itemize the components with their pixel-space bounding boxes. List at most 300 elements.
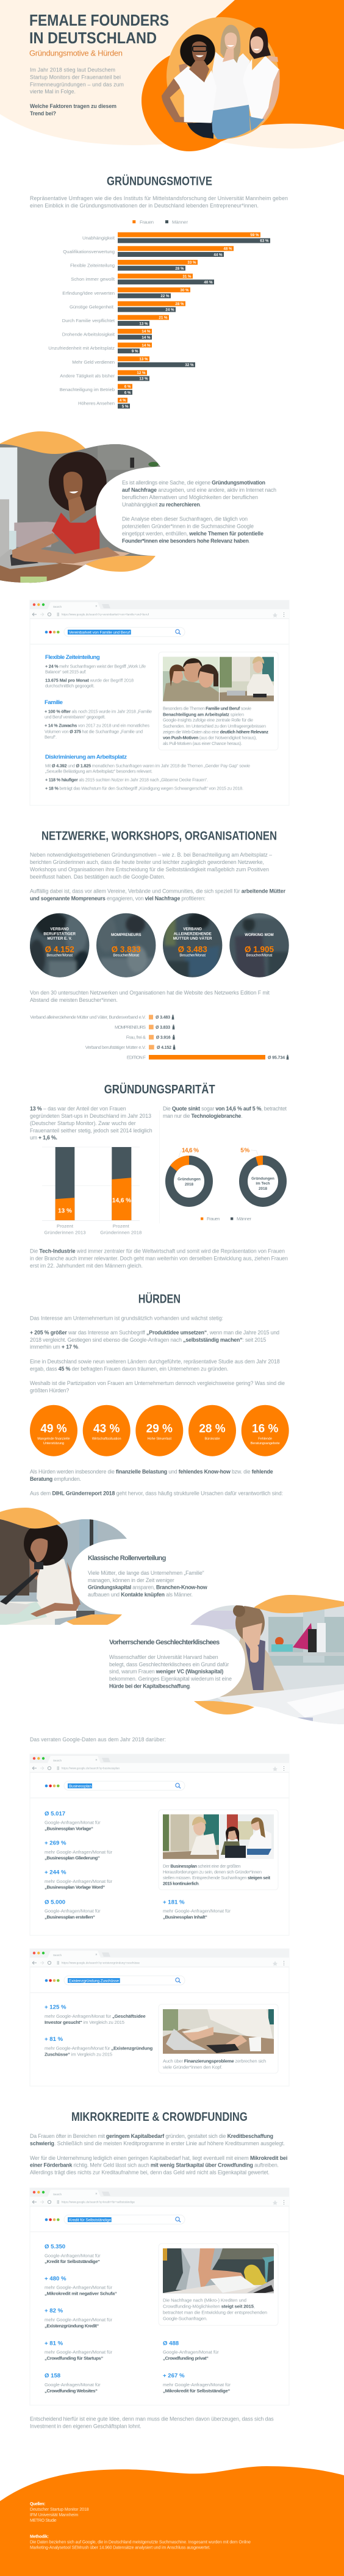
search box <box>64 1976 185 1985</box>
text: Edition F: Abstand die meisten Besucher*innen. <box>30 997 118 1003</box>
card: Nachfrage Mikrokredite: betrachtet man die Entwicklung der entsprechenden <box>163 2310 267 2315</box>
card: Businessplan: stellen müssen. Entsprechende Suchanfragen steigen seit <box>163 1875 271 1880</box>
text: Vorherrschende Geschlechterklischees: Wissenschaftler der Universität Harvard haben <box>109 1654 218 1660</box>
card: Finanzierungsprobleme <box>159 2004 278 2073</box>
bar chart: visitors: Ø 4.152 <box>157 1046 171 1050</box>
search box: Businessplan <box>69 1784 91 1789</box>
bar chart: motives: 22 % <box>160 294 170 298</box>
text: Familie <box>45 699 152 740</box>
card: Nachfrage Mikrokredite: Crowdfunding-Möglichkeiten steigt seit 2015, <box>163 2304 255 2309</box>
circle: Mompreneurs <box>96 913 156 982</box>
text: Entscheidend <box>30 2416 274 2430</box>
stat: Mikrokredit für Selbstständige: + 267 % <box>163 2373 185 2380</box>
stat circle: 28 % <box>188 1405 236 1456</box>
text: Interesse: immerhin um + 17 %. <box>30 1344 79 1350</box>
bar chart: motives: Schon immer gewollt <box>71 276 115 282</box>
bar chart: motives: 5 % <box>122 405 129 409</box>
text: Vorherrschende Geschlechterklischees: bekommen. Geringes Eigenkapital wiederum ist eine <box>109 1675 232 1682</box>
stat: Businessplan Gliederung: mehr Google-Anfragen/Monat für <box>45 1849 112 1855</box>
text: Netzwerke: Workshops und Organisationen ihre Entscheidung für die Selbstständigkeit maßgeblich zum Positiven <box>30 866 269 872</box>
stat: Crowdfunding für Startups: „Crowdfunding für Startups“ <box>45 2356 103 2361</box>
text: 13 %: gegründeten Start-ups in Deutschland im Jahr 2013 <box>30 1113 151 1119</box>
stat: Businessplan Inhalt <box>163 1899 231 1919</box>
search box: Kredit für Selbstständige <box>69 2218 111 2222</box>
intro paragraph: einen Einblick in die Gründungsmotivationen der in Deutschland lebenden Entrepreneur*innen. <box>30 203 259 209</box>
stat: Businessplan Vorlage: Ø 5.017 <box>45 1810 65 1817</box>
browser panel: Kredit für Selbstständige: ✕ <box>95 2192 98 2195</box>
stat: Mikrokredit mit negativer Schufa: mehr Google-Anfragen/Monat für <box>45 2285 112 2290</box>
methodology: Die Daten beziehen sich auf Google, die in Deutschland meistgenutzte Suchmaschine. Insgesamt wurden mit dem Online <box>30 2540 251 2544</box>
stat circle: 29 %: Hohe Steuerlast <box>148 1437 171 1441</box>
text: Interesse: Das Interesse am Unternehmertum ist grundsätzlich vorhanden und wächst stetig: <box>30 1315 223 1321</box>
stat: Businessplan Gliederung: + 269 % <box>45 1840 66 1847</box>
photo: woman with calculator <box>163 2009 274 2054</box>
text: Gründungsmotivation: eingetippt werden, enthüllen, welche Themen für potentielle <box>122 531 263 537</box>
text: Quote sinkt: Die Quote sinkt sogar von 14,6 % auf 5 %, betrachtet <box>163 1106 287 1112</box>
text: Netzwerke: und sogenannte Mompreneurs engagieren, von viel Nachfrage profitieren: <box>30 895 206 901</box>
bar chart: motives: 13 % <box>139 322 148 326</box>
address bar: https://www.google.de/search?q=kredit+für+selbstständige <box>62 2200 135 2204</box>
text: Netzwerke: berichten Gründerinnen auch, dass die heute breiter und leichter zugänglich gewordenen Netzwerke, <box>30 859 264 865</box>
text: Gründungsmotivation: potenziellen Gründer*innen in die Suchmaschine Google <box>122 523 254 530</box>
stat: Kredit für Selbstständige: Ø 5.350 <box>45 2243 65 2250</box>
browser panel: Kredit für Selbstständige: Search <box>53 2193 62 2196</box>
text: Familie: und Beruf vereinbaren“ gegoogelt. <box>45 714 106 720</box>
bar chart: motives: 63 % <box>260 239 269 243</box>
stat: Kredit für Selbstständige: „Kredit für Selbstständige“ <box>45 2259 100 2264</box>
stat: Crowdfunding Websites: Google-Anfragen/Monat für <box>45 2382 101 2387</box>
text: Gründungsmotivation: auf Nachfrage anzugeben, und eine andere, aktiv im Internet nach <box>122 487 276 493</box>
stat: Mikrokredit für Selbstständige <box>163 2373 231 2394</box>
text: Netzwerke: beeinflusst haben. Das bestätigen auch die Google-Daten. <box>30 874 165 880</box>
circle: Mompreneurs: Ø 3.833 <box>112 945 141 954</box>
stat: Existenzgründung Kredit: mehr Google-Anfragen/Monat für <box>45 2317 112 2323</box>
bar chart: motives: Mehr Geld verdienen <box>72 359 115 365</box>
donut chart: Gründungen im Tech 2018 <box>238 1148 287 1207</box>
stat: Geschäftsidee Investor gesucht <box>45 2004 146 2025</box>
stacked bar chart: 14,6 % <box>112 1197 131 1204</box>
stat: Existenzgründung Zuschüsse: Zuschüsse“ im Vergleich zu 2015 <box>45 2051 112 2057</box>
donut chart: Gründungen 2018: Gründungen <box>177 1178 201 1182</box>
stat: Crowdfunding privat: Google-Anfragen/Monat für <box>163 2350 219 2355</box>
donut chart: Gründungen 2018: 2018 <box>185 1182 193 1187</box>
bar chart: motives: Drohende Arbeitslosigkeit <box>62 332 115 337</box>
window controls <box>33 1757 45 1760</box>
legend: motives: Männer <box>172 219 188 225</box>
stat: Businessplan Vorlage: „Businessplan Vorlage“ <box>45 1826 93 1831</box>
bar chart: motives: 6 % <box>124 390 131 395</box>
stat: Businessplan Vorlage <box>45 1810 101 1831</box>
text: Vorherrschende Geschlechterklischees: sind, warum Frauen weniger VC (Wagniskapital) <box>109 1669 223 1675</box>
text: Netzwerke: Neben notwendigkeitsgetriebenen Gründungsmotiven – wie z. B. bei Benachteiligung am Arbeitsplatz – <box>30 852 272 858</box>
address bar <box>32 1766 284 1771</box>
intro text: Welche Faktoren tragen zu diesem <box>30 103 116 109</box>
circle: Verband alleinerziehende: Ø 3.483 <box>178 945 207 954</box>
stat: Businessplan Gliederung: „Businessplan Gliederung“ <box>45 1855 100 1861</box>
text: Klassische Rollenverteilung: Viele Mütter, die lange das Unternehmen „Familie“ <box>88 1570 204 1576</box>
bar chart: motives <box>48 232 270 409</box>
bar chart: visitors: Verband alleinerziehende Mütter und Väter, Bundesverband e.V. <box>30 1014 146 1020</box>
browser panel: Businessplan: Search <box>53 1759 62 1762</box>
text: Diskriminierung am Arbeitsplatz: „Sexuelle Belästigung am Arbeitsplatz“ besonders relevant. <box>45 769 152 774</box>
text: finanzielle Belastung: Beratung empfunden. <box>30 1476 81 1482</box>
browser panel: Vereinbarkeit von Familie und Beruf: Search <box>53 605 62 608</box>
browser panel: Existenzgründung Zuschüsse <box>30 1949 289 2086</box>
stacked bar chart: 13 % <box>58 1208 72 1215</box>
text: Familie: Beruf“. <box>45 735 57 740</box>
legend: donuts: Männer <box>237 1216 251 1221</box>
window controls <box>33 603 45 606</box>
stat: Crowdfunding privat: „Crowdfunding privat“ <box>163 2356 209 2361</box>
text: Mikrokredite <box>30 2133 287 2176</box>
search box: Vereinbarkeit von Familie und Beruf <box>69 631 130 635</box>
text: Interesse: Weshalb ist die Partizipation von Frauen am Unternehmertum dennoch vergleichsweise gering? Was sind die <box>30 1380 285 1386</box>
bar chart: motives: 14 % <box>142 336 151 340</box>
text: Familie: + 14 % Zuwachs von 2017 zu 2018 und ein monatliches <box>45 723 149 729</box>
card: Finanzierungsprobleme: viele Gründer*innen den Kopf. <box>163 2065 223 2070</box>
text: Netzwerke <box>30 852 286 901</box>
stat: Existenzgründung Zuschüsse: + 81 % <box>45 2036 63 2043</box>
text: Klassische Rollenverteilung: aufbauen und Kontakte knüpfen als Männer. <box>88 1592 193 1598</box>
browser panel: Businessplan <box>30 1754 289 1935</box>
text: Interesse: + 205 % größer war das Interesse am Suchbegriff „Produktidee umsetzen“, wenn man die Jahre 2015 und <box>30 1329 279 1336</box>
text: Gründungsmotivation: Es ist allerdings eine Sache, die eigene Gründungsmotivation <box>122 480 265 486</box>
logo dots <box>45 2218 60 2221</box>
photo: women working <box>163 1815 274 1859</box>
bar chart: motives: Günstige Gelegenheit <box>70 304 114 309</box>
text: finanzielle Belastung: Als Hürden werden insbesondere die finanzielle Belastung und fehlendes Know-how bzw. die fehlende <box>30 1469 273 1475</box>
stat: Existenzgründung Zuschüsse <box>45 2036 153 2057</box>
methodology: Methodik: <box>30 2535 49 2539</box>
stat circle: 16 % <box>242 1405 289 1456</box>
stat: Geschäftsidee Investor gesucht: + 125 % <box>45 2004 66 2011</box>
bar chart: motives: 6 % <box>124 385 131 389</box>
text: Quote sinkt: man nur die Technologiebranche. <box>163 1113 243 1119</box>
text: Gründungsmotivation: Die Analyse eben dieser Suchanfragen, die täglich von <box>122 516 248 522</box>
bar chart: motives: 59 % <box>250 233 259 237</box>
bar chart: visitors <box>30 1014 288 1060</box>
stat circle: 28 %: 28 % <box>199 1422 226 1435</box>
browser panel: Existenzgründung Zuschüsse: Search <box>53 1954 62 1957</box>
stat circle: 28 %: Bürokratie <box>204 1437 220 1441</box>
stat: Crowdfunding für Startups: + 81 % <box>45 2340 63 2347</box>
bar chart: motives: 30 % <box>180 288 189 292</box>
text: 13 %: (Deutscher Startup Monitor). Zwar wuchs der <box>30 1120 136 1126</box>
stat: Businessplan Inhalt: „Businessplan Inhalt“ <box>163 1914 207 1919</box>
hero background <box>0 0 344 151</box>
card: Familie und Beruf: Suchenden. Im Unterschied zu den Umfrageergebnissen <box>163 723 266 729</box>
icons: person <box>172 1015 288 1060</box>
bar chart: visitors: EDITION F <box>127 1054 146 1060</box>
stat: Businessplan Gliederung <box>45 1840 112 1861</box>
bar chart: motives: Andere Tätigkeit als bisher <box>60 373 115 378</box>
search box: Existenzgründung Zuschüsse <box>69 1979 119 1983</box>
bar chart: visitors: Verband berufstätiger Mütter e.V. <box>85 1045 146 1050</box>
search box <box>64 1781 185 1790</box>
stat: Mikrokredit mit negativer Schufa: + 480 % <box>45 2275 66 2282</box>
stat circle: 16 %: 16 % <box>252 1422 278 1435</box>
card: Familie und Beruf: Google-Insights zufolge eine zentrale Rolle für die <box>163 718 253 723</box>
text: Klassische Rollenverteilung: managen, können in der Zeit weniger <box>88 1577 174 1583</box>
stat: Existenzgründung Kredit: + 82 % <box>45 2308 63 2314</box>
bar chart: motives: 28 % <box>175 267 184 271</box>
photo blob: woman at laptop <box>0 431 160 583</box>
text: 13 % <box>30 1106 152 1141</box>
legend: motives <box>132 219 188 225</box>
circle: Mompreneurs: MOMPRENEURS <box>111 933 141 937</box>
intro text: Startup Monitors der Frauenanteil bei <box>30 74 121 81</box>
bar chart: motives: 4 % <box>120 398 126 403</box>
stat: Crowdfunding Websites: „Crowdfunding Websites“ <box>45 2388 98 2394</box>
methodology: Marketing-Analysetool SEMrush über 14.960 Datensätze analysiert und im Anschluss ausgewertet. <box>30 2546 210 2550</box>
text: Quote sinkt <box>163 1106 287 1119</box>
stat: Businessplan Vorlage Word: + 244 % <box>45 1869 66 1876</box>
text: 13 %: 13 % – das war der Anteil der von Frauen <box>30 1106 126 1112</box>
card: Familie und Beruf: Besonders die Themen Familie und Beruf sowie <box>163 706 251 711</box>
bar chart: motives: Qualifikationsverwertung <box>63 249 115 254</box>
stat: Geschäftsidee Investor gesucht: mehr Google-Anfragen/Monat für „Geschäftsidee <box>45 2013 146 2019</box>
bar chart: motives: 13 % <box>139 357 148 361</box>
circle: Working Mom: WORKING MOM <box>245 933 274 937</box>
circle: Verband alleinerziehende <box>163 913 222 979</box>
address bar <box>32 613 284 617</box>
stat: Businessplan Inhalt: + 181 % <box>163 1899 185 1905</box>
text: Diskriminierung am Arbeitsplatz: Mit Ø 4.392 und Ø 1.825 monatlichen Suchanfragen waren im Jahr 2018 die Themen „Gender Pay Gap“ sowie <box>45 763 250 768</box>
text: Mikrokredite: Allerdings trägt dies nichts zur Kreditaufnahme bei, denn das Geld wird nicht als Eigenkapital gewertet. <box>30 2170 270 2176</box>
card: Familie und Beruf <box>159 652 278 750</box>
stat: Businessplan Vorlage: Google-Anfragen/Monat für <box>45 1820 101 1826</box>
stat: Businessplan Vorlage Word: „Businessplan Vorlage Word“ <box>45 1885 105 1890</box>
circle: Verband berufstätiger Mütter: BERUFSTÄTIGER <box>43 932 76 936</box>
card: Nachfrage Mikrokredite: Die Nachfrage nach (Mikro-) Krediten und <box>163 2298 246 2303</box>
text: Diskriminierung am Arbeitsplatz <box>45 754 250 791</box>
subtitle: Gründungsmotive & Hürden <box>29 49 123 57</box>
circle: Verband berufstätiger Mütter: VERBAND <box>50 927 70 931</box>
circle: Working Mom: Ø 1.905 <box>245 945 274 954</box>
text: finanzielle Belastung: Aus dem DIHL Gründerreport 2018 geht hervor, dass häufig strukturelle Ursachen dafür verantwortlich sind: <box>30 1491 283 1497</box>
stat: Businessplan erstellen: „Businessplan erstellen“ <box>45 1914 95 1919</box>
legend: donuts <box>201 1216 251 1221</box>
text: Mikrokredite: einer Förderbank richtig. Mehr Geld lässt sich auch mit wenig Startkapital über Crowdfunding auftreiben. <box>30 2162 279 2168</box>
bar chart: motives: 12 % <box>137 371 146 375</box>
bar chart: visitors: Ø 3.833 <box>156 1026 170 1030</box>
stat circle: 49 %: Unterstützung <box>43 1442 64 1445</box>
text: Gründungsmotivation: Unabhängigkeit zu recherchieren. <box>122 502 201 508</box>
text: Flexible Zeiteinteilung: durchschnittlich gegoogelt. <box>45 683 95 689</box>
bar chart: motives: 48 % <box>223 247 232 251</box>
stat circle: 43 % <box>83 1405 131 1456</box>
legend: motives: Frauen <box>140 219 154 225</box>
stat: Businessplan Vorlage Word <box>45 1869 112 1890</box>
bar chart: motives: Unzufriedenheit mit Arbeitsplatz <box>48 345 115 351</box>
stat: Businessplan erstellen <box>45 1899 101 1919</box>
address bar <box>32 2200 284 2205</box>
text: Flexible Zeiteinteilung: Balance“ seit 2015 auf: <box>45 669 87 675</box>
browser panel: Vereinbarkeit von Familie und Beruf <box>30 600 289 805</box>
footer <box>0 2466 344 2576</box>
bar chart: visitors: Ø 3.483 <box>156 1015 170 1020</box>
stat: Mikrokredit für Selbstständige: mehr Google-Anfragen/Monat für <box>163 2382 231 2387</box>
stat: Mikrokredit für Selbstständige: „Mikrokredit für Selbstständige“ <box>163 2388 230 2394</box>
text: Vorherrschende Geschlechterklischees <box>109 1639 232 1689</box>
stat: Existenzgründung Zuschüsse: mehr Google-Anfragen/Monat für „Existenzgründung <box>45 2045 153 2051</box>
heading: Netzwerke: NETZWERKE, WORKSHOPS, ORGANISATIONEN <box>41 830 277 843</box>
stat: Businessplan Inhalt: mehr Google-Anfragen/Monat für <box>163 1909 231 1914</box>
address bar <box>32 1961 284 1966</box>
heading: Mikrokredite: MIKROKREDITE & CROWDFUNDING <box>71 2110 248 2124</box>
photo blob: businesswoman <box>0 1595 344 1727</box>
text: Flexible Zeiteinteilung: 13.675 Mal pro Monat wurde der Begriff 2018 <box>45 677 134 683</box>
bar chart: visitors: MOMPRENEURS <box>115 1024 146 1030</box>
stat circle: 49 %: 49 % <box>40 1422 67 1435</box>
circle: Working Mom: Besucher/Monat <box>246 954 273 958</box>
title: IN DEUTSCHLAND <box>29 29 157 47</box>
circle: Working Mom <box>229 912 293 979</box>
bar chart: motives: Durch Familie verpflichtet <box>62 318 115 323</box>
intro paragraph: Repräsentative Umfragen wie die des Instituts für Mittelstandsforschung der Universität Mannheim geben <box>30 195 288 201</box>
circle: Verband berufstätiger Mütter: Ø 4.152 <box>45 945 74 954</box>
text: 13 %: Frauenanteil seither stetig, jedoch seit 2014 lediglich <box>30 1128 152 1134</box>
text: Interesse: größten Hürden? <box>30 1387 69 1394</box>
text: Flexible Zeiteinteilung: + 24 % mehr Suchanfragen weist der Begriff „Work Life <box>45 663 146 669</box>
text: Interesse: Eine in Deutschland sowie neun weiteren Ländern durchgeführte, repräsentative Studie aus dem Jahr 2018 <box>30 1359 280 1365</box>
text: Netzwerke: Auffällig dabei ist, dass vor allem Vereine, Verbände und Communities, die sich speziell für arbeitende Mütter <box>30 888 286 894</box>
text: Tech-Industrie <box>30 1248 288 1268</box>
circle: Verband alleinerziehende: ALLEINERZIEHENDE <box>174 932 212 936</box>
card: Finanzierungsprobleme: Auch über Finanzierungsprobleme zerbrechen sich <box>163 2059 266 2064</box>
text: Edition F <box>30 990 270 1003</box>
photo blob: woman on phone <box>0 1508 127 1625</box>
text: Interesse: 2018 vergleicht. Gestiegen sind ebenso die Google-Anfragen nach „selbstständig machen“: seit 2015 <box>30 1337 266 1343</box>
donut chart: Gründungen 2018 <box>162 1148 217 1211</box>
bar chart: visitors: Ø 95.734 <box>268 1056 285 1060</box>
circle: Verband berufstätiger Mütter: Besucher/Monat <box>46 954 73 958</box>
intro text <box>30 67 124 117</box>
text: Gründungsmotivation: Founder*innen eine besonders hohe Relevanz haben. <box>122 538 250 544</box>
stacked bar chart: Prozent <box>113 1223 130 1229</box>
stacked bar chart: Prozent <box>57 1223 74 1229</box>
stacked bar chart <box>42 1147 142 1236</box>
bar chart: motives: 14 % <box>142 329 151 334</box>
text: Mikrokredite: schwierig. Schließlich sind die meisten Kreditprogramme in erster Linie auf höhere Kreditsummen ausgelegt. <box>30 2140 285 2146</box>
stat circle: 16 %: Fehlende <box>258 1437 272 1441</box>
circle: Mompreneurs: Besucher/Monat <box>113 954 139 958</box>
stat circle: 16 %: Beratungsangebote <box>251 1442 280 1445</box>
card: Familie und Beruf: von Push-Motiven (aus der Notwendigkeit heraus), <box>163 735 257 740</box>
bar chart: motives: 32 % <box>185 363 194 367</box>
text: Tech-Industrie: Die Tech-Industrie wird immer zentraler für die Weltwirtschaft und somit wird die Repräsentation von Frauen <box>30 1248 285 1254</box>
text: Diskriminierung am Arbeitsplatz: + 118 % häufiger als 2015 suchten Nutzer im Jahr 2018 nach „Gläserne Decke Frauen“. <box>45 777 208 782</box>
donut chart: Gründungen im Tech 2018: Gründungen <box>251 1177 274 1181</box>
donut chart: Gründungen im Tech 2018: im Tech <box>256 1182 270 1186</box>
bar chart: motives: 31 % <box>182 275 192 279</box>
text: Klassische Rollenverteilung: Klassische Rollenverteilung <box>88 1555 166 1562</box>
stat: Existenzgründung Kredit <box>45 2308 112 2328</box>
text: Interesse <box>30 1315 285 1394</box>
browser panel: Businessplan: ✕ <box>95 1758 98 1761</box>
card: Businessplan: 2015 kontinuierlich. <box>163 1881 199 1887</box>
stat: Mikrokredit mit negativer Schufa <box>45 2275 117 2297</box>
text: Familie: Volumen von Ø 375 hat die Suchanfrage „Familie und <box>45 729 143 734</box>
card: Familie und Beruf: zeigen die Web-Daten also eine deutlich höhere Relevanz <box>163 729 268 735</box>
photo: woman reading <box>163 2248 274 2293</box>
address bar: https://www.google.de/search?q=businessplan <box>62 1767 120 1769</box>
stat: Geschäftsidee Investor gesucht: Investor gesucht“ im Vergleich zu 2015 <box>45 2020 124 2025</box>
search box <box>64 2215 185 2224</box>
bar chart: motives: Unabhängigkeit <box>82 235 115 240</box>
text: Familie: Familie <box>45 699 63 706</box>
donut chart: Gründungen 2018: 14,6 % <box>182 1148 199 1154</box>
text: Diskriminierung am Arbeitsplatz: + 18 % beträgt das Wachstum für den Suchbegriff „Kündigung wegen Schwangerschaft“ von 2015 zu 2018. <box>45 786 243 791</box>
bar chart: motives: 44 % <box>213 253 223 257</box>
sources <box>30 2502 89 2523</box>
address bar: https://www.google.de/search?q=vereinbarkeit+von+familie+und+beruf <box>62 613 149 616</box>
bar chart: motives: 21 % <box>159 316 168 320</box>
text: Tech-Industrie: erst im 22. Jahrhundert mit den Männern gleich. <box>30 1262 143 1268</box>
stat: Businessplan erstellen: Google-Anfragen/Monat für <box>45 1909 101 1914</box>
bar chart: motives: Erfindung/Idee verwerten <box>62 290 115 296</box>
stacked bar chart: Gründerinnen 2018 <box>100 1230 142 1236</box>
bar chart: motives: 13 % <box>139 377 148 381</box>
heading: Gründungsparität: GRÜNDUNGSPARITÄT <box>104 1082 215 1096</box>
intro text: Trend bei? <box>30 110 56 117</box>
stat circle: 29 % <box>135 1405 183 1456</box>
bar chart: motives: Benachteiligung im Betrieb <box>60 387 115 392</box>
text: Tech-Industrie: in der Branche auch immer relevanter. Doch geht man weiterhin von derselben Entwicklung aus, ziehen Frauen <box>30 1255 288 1261</box>
stat: Crowdfunding Websites: Ø 158 <box>45 2373 61 2380</box>
stat circle: 43 %: 43 % <box>93 1422 120 1435</box>
text: Vorherrschende Geschlechterklischees: belegt, dass Geschlechterklischees ein Grund dafür <box>109 1661 229 1668</box>
window controls <box>33 1952 45 1954</box>
text: Edition F: Von den 30 untersuchten Netzwerken und Organisationen hat die Website des Netzwerks Edition F mit <box>30 990 270 996</box>
search box <box>64 627 185 636</box>
text: Klassische Rollenverteilung: Gründungskapital ansparen, Branchen-Know-how <box>88 1585 207 1591</box>
bar chart: motives: Höheres Ansehen <box>78 401 115 406</box>
stat circle: 43 %: Wirtschaftssituation <box>92 1437 121 1441</box>
donut chart: Gründungen im Tech 2018: 5 % <box>240 1148 249 1154</box>
text: Vorherrschende Geschlechterklischees: Vorherrschende Geschlechterklischees <box>109 1639 220 1646</box>
circle: Verband alleinerziehende: MÜTTER UND VÄTER <box>173 937 212 941</box>
bar chart: visitors: Ø 3.916 <box>156 1036 171 1040</box>
intro text: vierte Mal in Folge. <box>30 88 76 95</box>
text: Entscheidend: Entscheidend hierfür ist eine gute Idee, denn man muss die Menschen davon überzeugen, dass sich das <box>30 2416 274 2422</box>
heading: Gründungsmotive: GRÜNDUNGSMOTIVE <box>107 174 212 189</box>
text: Mikrokredite: Da Frauen öfter in Bereichen mit geringem Kapitalbedarf gründen, gestaltet sich die Kreditbeschaffung <box>30 2133 273 2139</box>
stat: Businessplan erstellen: Ø 5.000 <box>45 1899 65 1905</box>
legend: donuts: Frauen <box>207 1216 220 1221</box>
stat: Crowdfunding für Startups <box>45 2340 112 2361</box>
heading: Hürden: HÜRDEN <box>138 1292 181 1306</box>
sources: Quellen: <box>30 2502 45 2506</box>
hero photo: three women <box>162 25 280 139</box>
card: Familie und Beruf: Benachteiligung am Arbeitsplatz spielen <box>163 711 244 717</box>
stat: Kredit für Selbstständige: Google-Anfragen/Monat für <box>45 2253 101 2258</box>
bar chart: motives: 14 % <box>142 344 151 348</box>
logo dots <box>45 1785 60 1787</box>
logo dots <box>45 631 60 633</box>
text: Mikrokredite: Wer für die Unternehmung lediglich einen geringen Kapitalbedarf hat, liegt eventuell mit einem Mikrokredit bei <box>30 2155 287 2161</box>
text: Familie: + 100 % öfter als noch 2015 wurde im Jahr 2018 „Familie <box>45 708 152 714</box>
stat: Businessplan Vorlage Word: mehr Google-Anfragen/Monat für <box>45 1879 112 1884</box>
bar chart: motives: 33 % <box>187 261 196 265</box>
stat: Crowdfunding privat: Ø 488 <box>163 2340 179 2347</box>
donut chart: Gründungen im Tech 2018: 2018 <box>259 1187 267 1191</box>
stat: Mikrokredit mit negativer Schufa: „Mikrokredit mit negativer Schufa“ <box>45 2291 117 2297</box>
browser panel: Kredit für Selbstständige <box>30 2188 289 2405</box>
text: finanzielle Belastung <box>30 1469 283 1497</box>
stat: Crowdfunding privat <box>163 2340 219 2361</box>
stat: Existenzgründung Kredit: „Existenzgründung Kredit“ <box>45 2323 99 2328</box>
